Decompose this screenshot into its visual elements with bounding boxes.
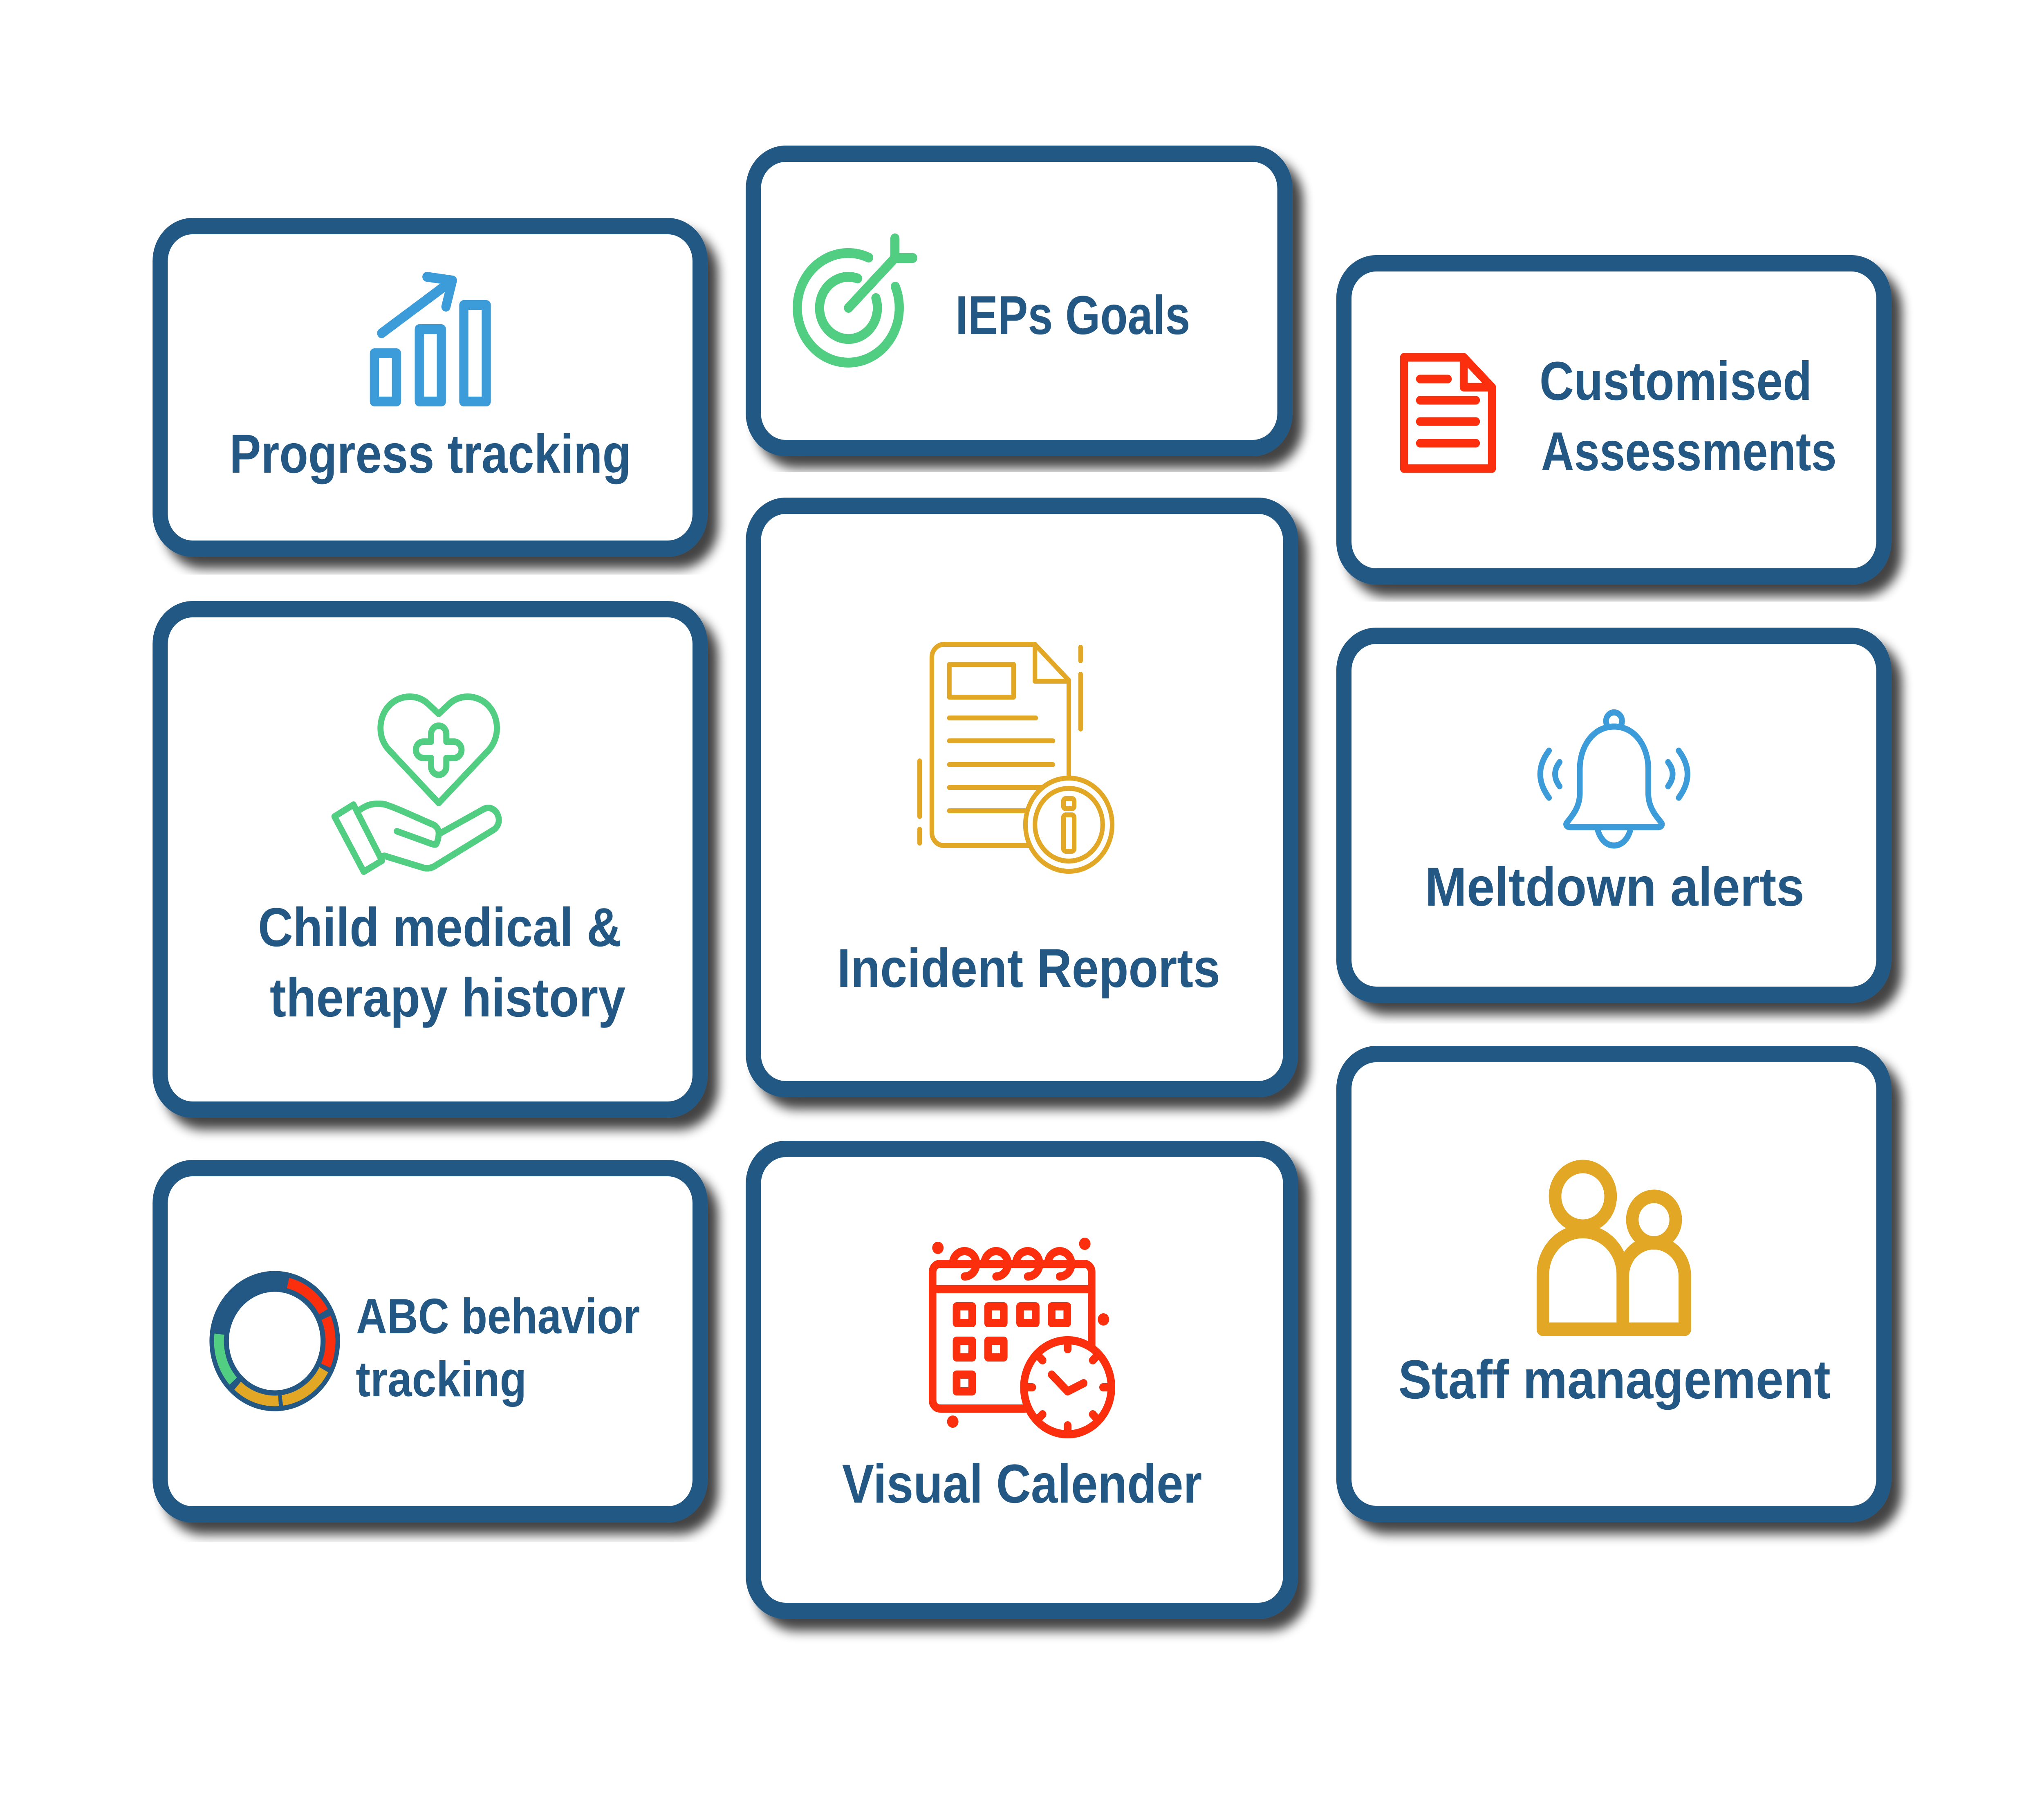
label: Child medical & therapy history: Child medical & [258,897,622,958]
label: Progress tracking: Progress tracking [229,424,631,485]
panel: Incident Reports [753,506,1291,1089]
label: Child medical & therapy history: therapy history [270,967,625,1028]
panel: Progress tracking [160,226,700,549]
label: Customised Assessments: Assessments [1541,421,1837,482]
icon: hand holding heart [334,697,499,872]
panel: Visual Calender [753,1149,1291,1611]
icon: red document [1404,357,1492,469]
label: Child medical & therapy history [258,897,625,1028]
label: Customised Assessments [1540,351,1837,482]
panel: Staff management [1344,1054,1884,1514]
label: Visual Calender: Visual Calender [842,1454,1202,1514]
icon: segmented ring [219,1281,331,1401]
label: Incident Reports: Incident Reports [837,938,1220,999]
icon: ringing bell [1540,712,1688,846]
icon: calendar with clock [932,1251,1112,1434]
icon: rising bar chart [374,277,486,402]
label: IEPs Goals: IEPs Goals [955,285,1190,346]
label: ABC behavior tracking: ABC behavior [356,1288,640,1344]
icon: document with info badge [920,644,1112,871]
label: ABC behavior tracking: tracking [356,1351,527,1407]
label: ABC behavior tracking [356,1288,640,1407]
panel: Meltdown alerts [1344,636,1884,995]
icon: target with dart [797,238,913,363]
panel: IEPs Goals [753,154,1285,448]
panel: Child medical and therapy history [160,609,700,1110]
label: Staff management: Staff management [1399,1349,1831,1410]
panel: ABC behavior tracking [160,1168,700,1514]
label: Customised Assessments: Customised [1540,351,1812,412]
panel: Customised Assessments [1344,263,1884,577]
icon: calendar dots [932,1238,1109,1428]
icon: two people [1543,1166,1685,1329]
label: Meltdown alerts: Meltdown alerts [1425,857,1804,917]
